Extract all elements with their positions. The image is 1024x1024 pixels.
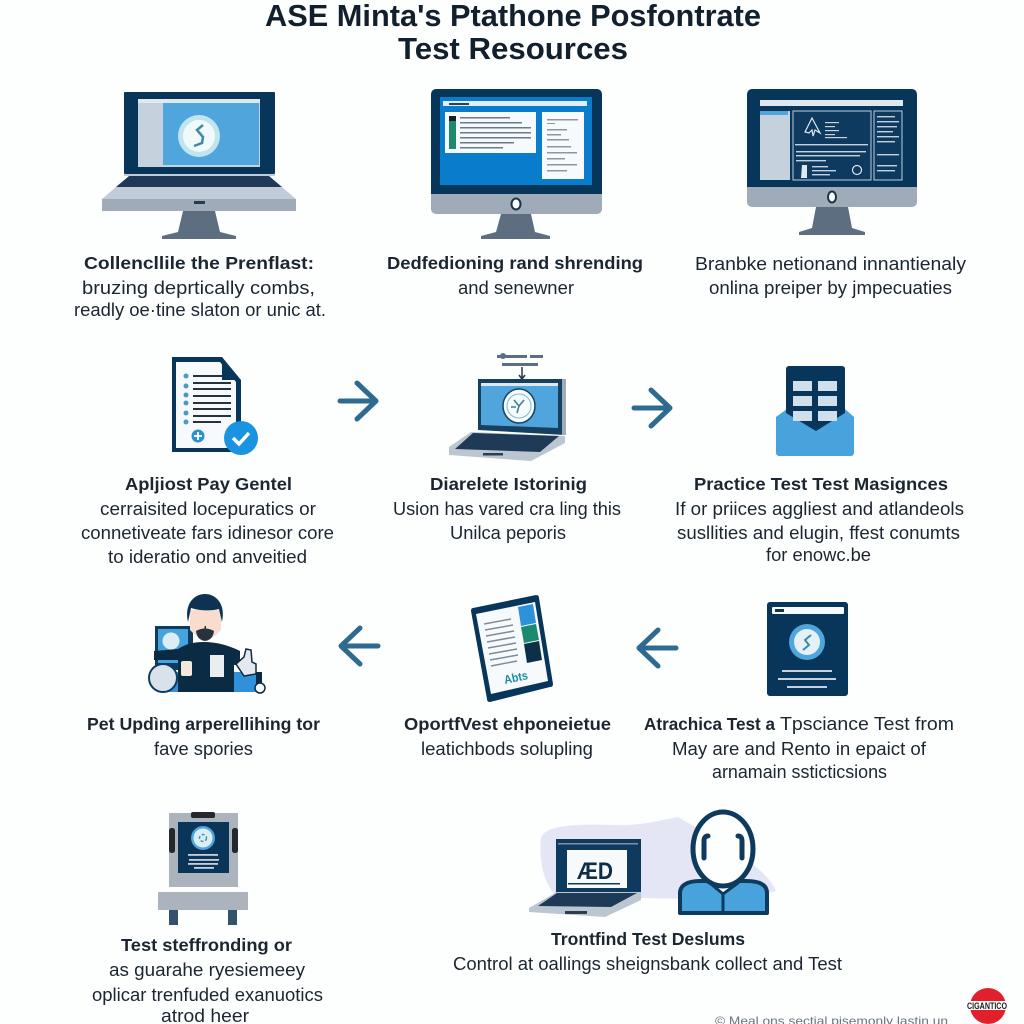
text block: item 3: onlina preiper by jmpecuaties <box>709 278 952 298</box>
text block: item 9: May are and Rento in epaict of <box>672 739 927 759</box>
icon: person at laptop <box>149 594 265 693</box>
title: ASE Minta's Ptathone Posfontrate <box>265 0 761 33</box>
text block: item 3: Branbke netionand innantienaly <box>695 254 966 274</box>
text block: item 8: OportfVest ehponeietue <box>404 714 611 734</box>
logo badge <box>966 988 1010 1024</box>
text block: item 10 <box>92 935 323 1024</box>
text block: item 5: Usion has vared cra ling this <box>393 499 621 519</box>
text block: item 10: Test steffronding or <box>121 935 292 955</box>
icon: envelope with grid <box>776 366 854 456</box>
text block: item 11 <box>453 929 842 974</box>
text block: item 2: and senewner <box>458 278 574 298</box>
icon: tablet: Abts <box>503 668 529 687</box>
text block: item 9: Atrachica Test a <box>644 714 775 734</box>
arrow: right <box>634 390 670 426</box>
text block: item 6: If or priices aggliest and atlandeols <box>675 499 964 519</box>
icon: document with check <box>172 357 258 455</box>
text block: item 4: to ideratio ond anveitied <box>108 547 307 567</box>
text block: item 6 <box>675 474 964 565</box>
text block: item 4: connetiveate fars idinesor core <box>81 523 334 543</box>
text block: item 8 <box>404 714 611 759</box>
icon: laptop and person on lavender blob <box>529 812 776 917</box>
text block: item 9 <box>644 714 954 782</box>
logo badge: CIGANTICO <box>967 1001 1007 1011</box>
icon: desktop monitor with document <box>431 89 602 239</box>
text block: item 11: Control at oallings sheignsbank collect and Test <box>453 954 842 974</box>
text block: item 6: for enowc.be <box>766 545 871 565</box>
text block: item 9: arnamain ssticticsions <box>712 762 887 782</box>
arrow: left <box>639 630 676 666</box>
text block: item 1: bruzing deprtically combs, <box>82 278 315 298</box>
text block: item 6: Practice Test Test Masignces <box>694 474 948 494</box>
arrow: right <box>340 383 376 419</box>
text block: item 5 <box>393 474 621 543</box>
title: Test Resources <box>398 32 628 66</box>
text block: item 1: readly oe·tine slaton or unic at. <box>74 300 326 320</box>
icon: document card <box>767 602 848 696</box>
text block: item 1: Collencllile the Prenflast: <box>84 253 314 273</box>
text block: item 4 <box>81 474 334 567</box>
icon: tablet <box>471 595 553 702</box>
text block: item 5: Diarelete Istorinig <box>430 474 587 494</box>
text block: item 9: Tpsciance Test from <box>780 714 954 734</box>
text block: item 11: Trontfind Test Deslums <box>551 929 745 949</box>
text block: item 3 <box>695 254 966 298</box>
title <box>265 0 761 66</box>
icon: laptop on stand <box>102 92 296 239</box>
text block: item 2: Dedfedioning rand shrending <box>387 253 643 273</box>
icon: kiosk on table <box>158 812 248 925</box>
text block: item 6: susllities and elugin, ffest conumts <box>677 523 960 543</box>
text block: item 2 <box>387 253 643 298</box>
text block: item 10: oplicar trenfuded exanuotics <box>92 985 323 1005</box>
icon: laptop and person on lavender blob: ÆD <box>577 858 613 885</box>
text block: item 1 <box>74 253 326 320</box>
text block: item 7: Pet Updìng arperellihing tor <box>87 714 320 734</box>
text block: item 8: leatichbods solupling <box>421 739 593 759</box>
arrow: left <box>341 628 378 664</box>
text block: item 4: cerraisited locepuratics or <box>100 499 316 519</box>
icon: open laptop with settings <box>449 353 566 461</box>
icon: desktop monitor with dashboard <box>747 89 917 235</box>
text block: item 7: fave spories <box>154 739 253 759</box>
text block: item 7 <box>87 714 320 759</box>
text block: item 5: Unilca peporis <box>450 523 566 543</box>
text block: item 10: as guarahe ryesiemeey <box>109 960 305 980</box>
text block: item 4: Apljiost Pay Gentel <box>125 474 292 494</box>
